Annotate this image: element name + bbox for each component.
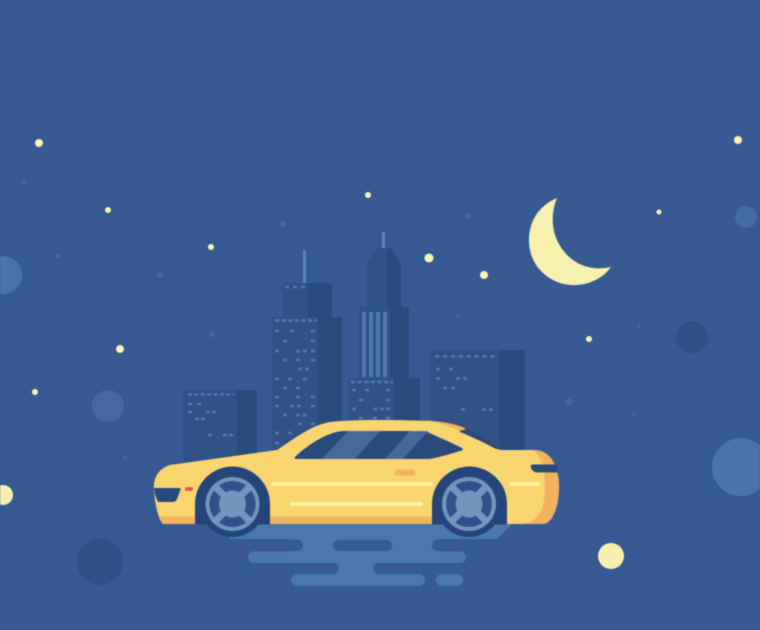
large cream orbs [0, 485, 624, 569]
building: tall left tower [272, 250, 342, 452]
lower sill stripe [158, 516, 432, 524]
crescent moon [529, 198, 611, 285]
yellow car [154, 420, 559, 537]
door handle [395, 470, 415, 476]
rear window sliver [460, 430, 501, 449]
faint distant dots [22, 181, 641, 460]
body highlight lines [271, 482, 540, 506]
car body [154, 420, 545, 524]
front headlight [154, 488, 181, 502]
reflection puddle [222, 524, 512, 586]
side window [294, 431, 463, 459]
roof rear accent [425, 420, 466, 431]
car body rear orange panel [500, 450, 559, 524]
rear tail light [531, 464, 558, 472]
background bubbles [0, 206, 760, 585]
window reflections [322, 431, 428, 459]
front wheel [195, 467, 270, 537]
city skyline [183, 232, 525, 462]
building: right block [430, 350, 525, 450]
building: far left [183, 390, 257, 462]
stars [32, 136, 742, 395]
front marker light [185, 487, 193, 491]
building: central spire tower [348, 232, 420, 438]
rear wheel [432, 467, 507, 537]
